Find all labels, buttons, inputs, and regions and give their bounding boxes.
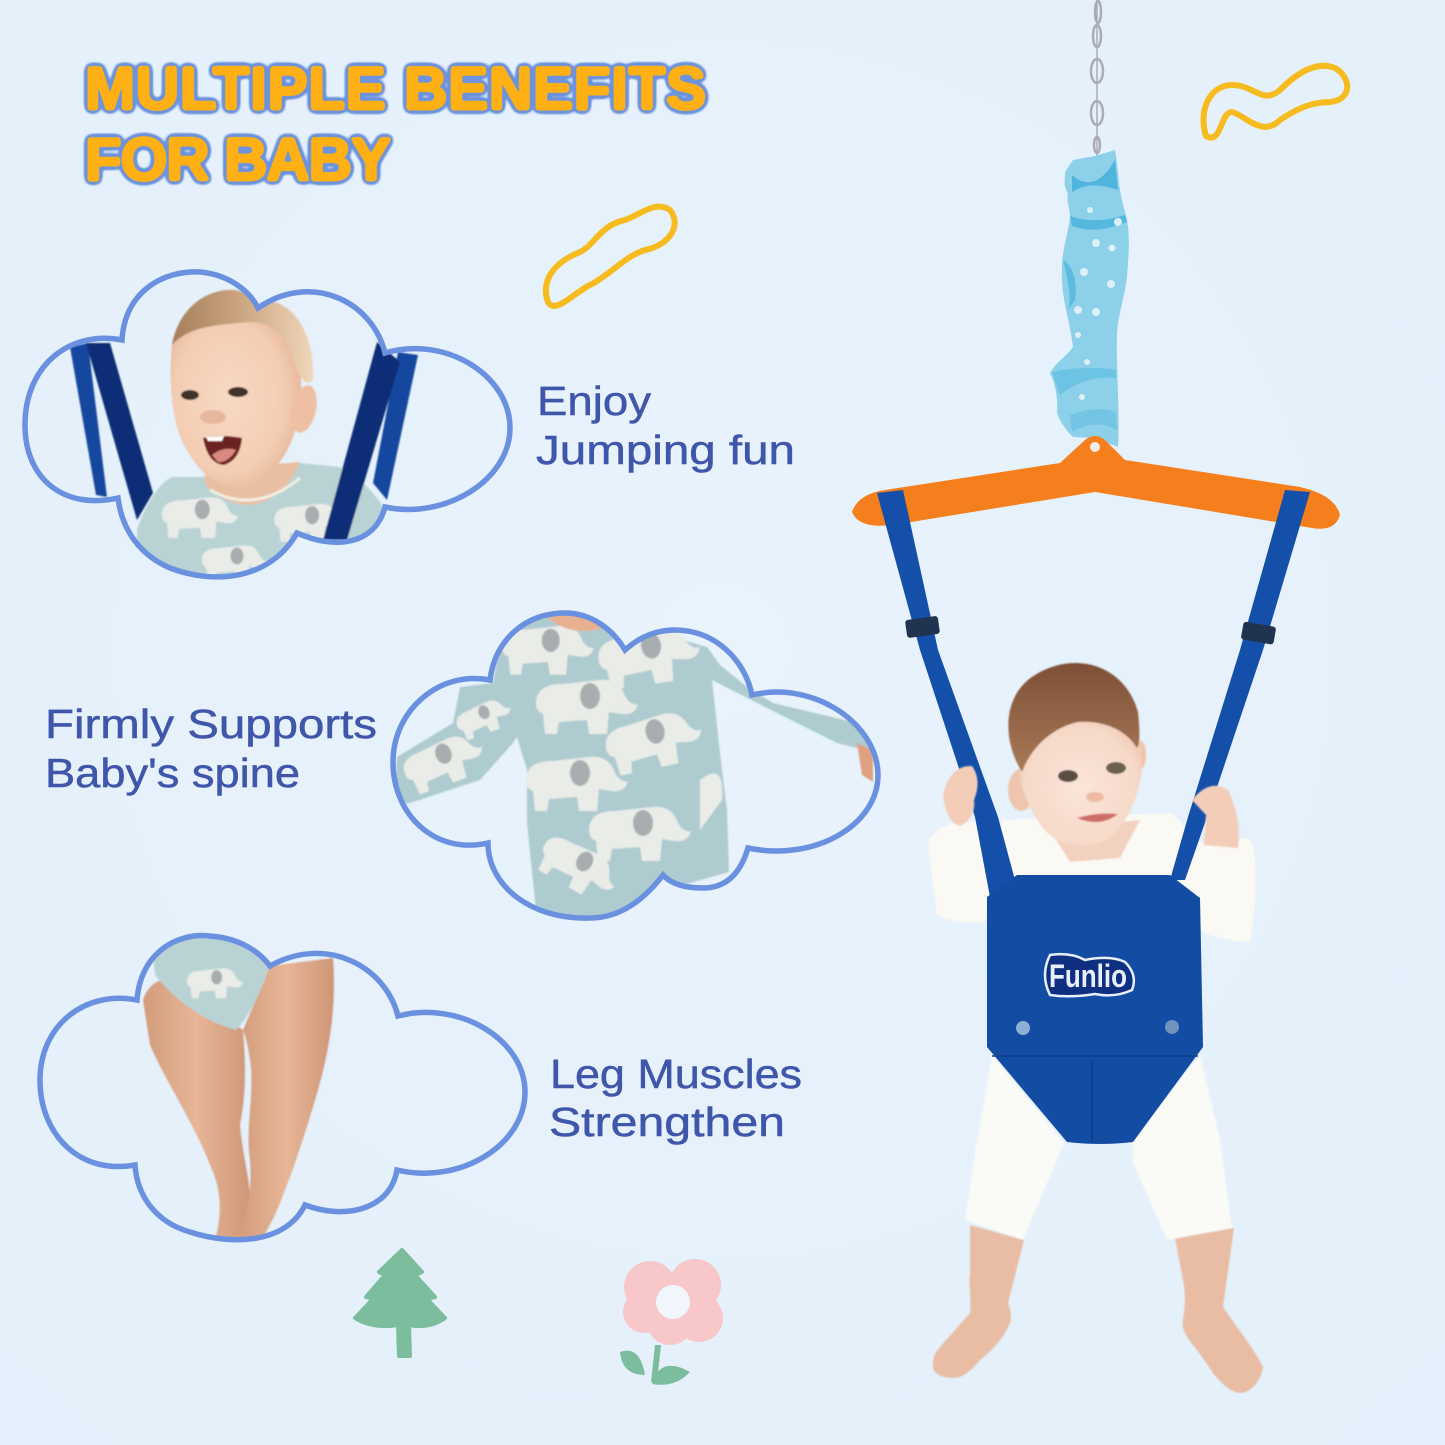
caption: jumping fun: Enjoy [537, 378, 652, 424]
hands gripping straps [943, 766, 1239, 848]
shirt [985, 813, 1205, 890]
eyes and mouth [1058, 770, 1078, 782]
caption: leg muscles: Strengthen [549, 1099, 785, 1145]
neck [1050, 820, 1140, 862]
caption: spine support: Firmly Supports [45, 701, 377, 747]
caption: leg muscles [549, 1051, 802, 1145]
icon: green tree [355, 1250, 445, 1356]
title: FOR BABY [85, 126, 391, 193]
cloud outline [25, 272, 510, 577]
white shorts [965, 1055, 1064, 1240]
ears [1008, 769, 1034, 811]
caption: leg muscles: Leg Muscles [550, 1051, 802, 1097]
bodysuit [136, 462, 382, 574]
photo: laughing baby [70, 290, 418, 590]
hair [1008, 663, 1139, 772]
caption: jumping fun: Jumping fun [536, 427, 795, 473]
ear [294, 384, 318, 434]
hair [172, 290, 313, 382]
panel: spine support cloud [393, 608, 878, 920]
neck [205, 462, 300, 505]
orange handle bar [852, 436, 1340, 529]
caption: jumping fun [536, 378, 795, 473]
product: baby jumper [852, 0, 1340, 1393]
straps [70, 343, 107, 497]
cloud outline [40, 936, 525, 1240]
photo: baby legs [143, 930, 334, 1240]
decoration: yellow squiggle centre [546, 207, 675, 306]
panel: jumping fun cloud [25, 272, 510, 590]
title: MULTIPLE BENEFITS [85, 55, 706, 122]
icon: pink flower [620, 1259, 723, 1385]
chain [1091, 0, 1103, 160]
calves and feet [933, 1225, 1024, 1378]
snap buttons [1016, 1021, 1030, 1035]
cloud outline [393, 613, 878, 918]
face [1020, 717, 1142, 845]
sleeves [928, 821, 1000, 923]
straps [877, 490, 1015, 897]
spring cover [1050, 150, 1129, 447]
strap buckles [905, 616, 940, 638]
title [85, 55, 706, 193]
photo: elephant bodysuit torso [395, 608, 873, 920]
logo: Funlio: Funlio [1049, 958, 1127, 994]
decoration: yellow squiggle top right [1204, 66, 1347, 138]
caption: spine support: Baby's spine [45, 750, 300, 796]
face [171, 308, 301, 488]
caption: spine support [45, 701, 377, 796]
panel: leg muscles cloud [40, 930, 525, 1240]
seat panel [987, 875, 1203, 1144]
baby [928, 663, 1263, 1393]
